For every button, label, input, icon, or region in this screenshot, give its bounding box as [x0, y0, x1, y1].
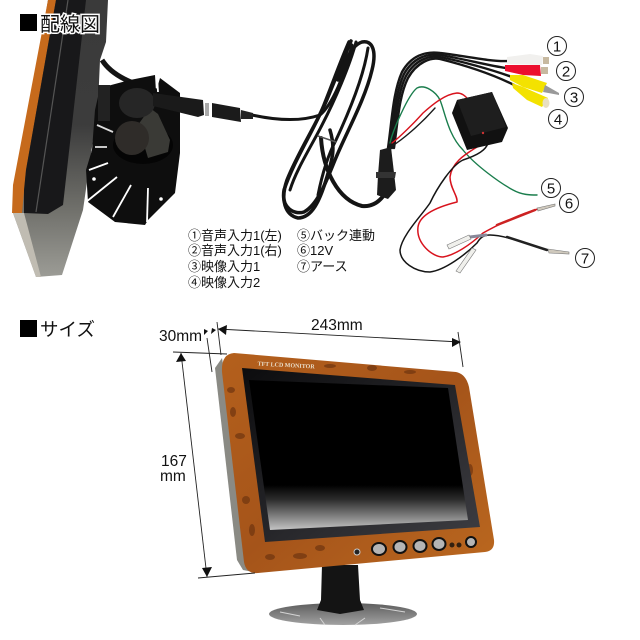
- wiring legend: [188, 228, 375, 290]
- stand base: [269, 603, 417, 625]
- plug on monitor cable: [153, 93, 253, 122]
- number callouts: [542, 36, 594, 268]
- number callouts: 1: [553, 38, 561, 56]
- wiring legend: ⑦アース: [297, 259, 348, 274]
- dimension labels: 243mm: [311, 317, 363, 334]
- dimension labels: 30mm: [159, 328, 202, 345]
- wiring legend: ③映像入力1: [188, 259, 260, 274]
- screen: [249, 380, 468, 530]
- wiring legend: ②音声入力1(右): [188, 243, 282, 258]
- brand text: TFT LCD MONITOR: [257, 362, 315, 371]
- dimension labels: 167: [161, 453, 187, 470]
- dimension labels: mm: [160, 468, 186, 485]
- swivel arm: [113, 126, 173, 164]
- number callouts: 6: [565, 196, 573, 212]
- title: wiring diagram: 配線図: [40, 13, 100, 36]
- junction box: [452, 92, 508, 150]
- wood strip: [12, 0, 56, 213]
- number callouts: 7: [581, 250, 589, 268]
- number callouts: 4: [554, 112, 562, 128]
- RCA and connector cables: [388, 53, 514, 148]
- monitor front view: [215, 353, 494, 625]
- wood burl marks: [227, 364, 473, 560]
- black rear shell: [24, 0, 86, 214]
- coiled monitor cable: [252, 41, 386, 218]
- title: size: サイズ: [40, 319, 95, 340]
- monitor grey back: [13, 0, 108, 277]
- dimension labels: [159, 317, 363, 485]
- side edge: [215, 358, 258, 573]
- mount plate: [86, 75, 180, 225]
- inline connector: [376, 147, 396, 199]
- mount slots: [86, 75, 163, 222]
- thin wires: [390, 87, 547, 272]
- number callouts: 2: [562, 64, 570, 80]
- cable leaving monitor: [102, 60, 163, 93]
- bezel: [242, 368, 480, 542]
- wiring legend: ①音声入力1(左): [188, 228, 282, 243]
- wiring legend: ⑥12V: [297, 243, 333, 258]
- wire terminals: [447, 204, 569, 273]
- dimension lines: [173, 322, 463, 578]
- number callouts: 3: [570, 90, 578, 106]
- side view of monitor with mount: [12, 0, 180, 277]
- RCA plugs: [505, 54, 559, 108]
- stand neck: [317, 565, 364, 614]
- swivel knob: [115, 121, 149, 155]
- wood frame: [222, 353, 494, 573]
- wiring legend: ④映像入力2: [188, 275, 260, 290]
- number callouts: 5: [547, 180, 555, 198]
- swivel ball joint: [119, 88, 155, 118]
- front controls: [372, 537, 476, 555]
- wiring legend: ⑤バック連動: [297, 228, 375, 243]
- mount block: [98, 85, 110, 121]
